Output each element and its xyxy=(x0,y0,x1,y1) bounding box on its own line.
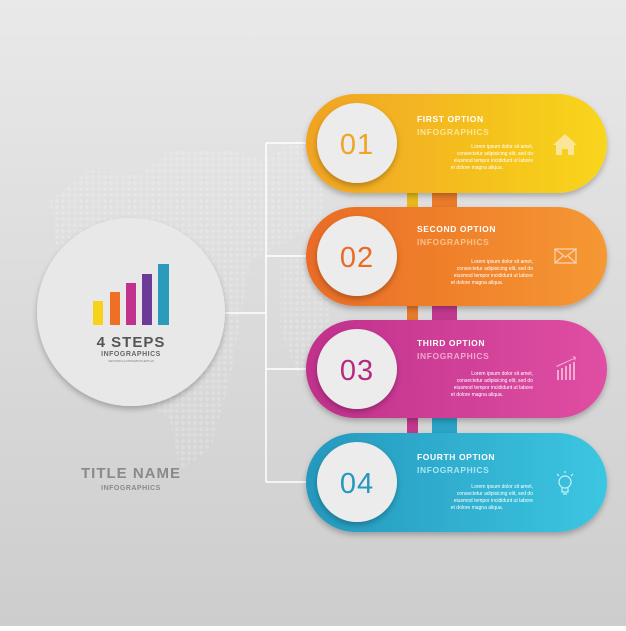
option 4: eiusmod tempor incididunt ut labore xyxy=(454,498,533,504)
option 1: 01 xyxy=(340,129,374,161)
option 2: SECOND OPTION xyxy=(417,224,496,234)
option 1 xyxy=(306,94,607,193)
option 3: consectetur adipisicing elit, sed do xyxy=(457,378,533,384)
option 3: 03 xyxy=(340,355,374,387)
option 1: Lorem ipsum dolor sit amet, xyxy=(471,144,533,150)
option 1: INFOGRAPHICS xyxy=(417,127,489,137)
option 3 xyxy=(306,320,607,418)
option 4: consectetur adipisicing elit, sed do xyxy=(457,491,533,497)
option 4 xyxy=(306,433,607,532)
option 2: 02 xyxy=(340,242,374,274)
option 3: et dolore magna aliqua. xyxy=(451,392,503,398)
icon: envelope xyxy=(555,249,576,263)
connector strips xyxy=(407,190,457,436)
option 2: et dolore magna aliqua. xyxy=(451,280,503,286)
option 1: FIRST OPTION xyxy=(417,114,484,124)
main circle: INFOGRAPHICS xyxy=(101,351,161,358)
option 2: INFOGRAPHICS xyxy=(417,237,489,247)
main circle xyxy=(37,218,225,406)
icon: bulb xyxy=(557,471,573,494)
option 4: 04 xyxy=(340,468,374,500)
title name xyxy=(81,465,181,492)
option 3: THIRD OPTION xyxy=(417,338,485,348)
option 3: Lorem ipsum dolor sit amet, xyxy=(471,371,533,377)
option 2: eiusmod tempor incididunt ut labore xyxy=(454,273,533,279)
option 1: consectetur adipisicing elit, sed do xyxy=(457,151,533,157)
option 4: et dolore magna aliqua. xyxy=(451,505,503,511)
title name: INFOGRAPHICS xyxy=(101,485,161,492)
option 3: INFOGRAPHICS xyxy=(417,351,489,361)
icon: growth chart xyxy=(556,356,576,380)
option 1: eiusmod tempor incididunt ut labore xyxy=(454,158,533,164)
option 4: Lorem ipsum dolor sit amet, xyxy=(471,484,533,490)
option 1: et dolore magna aliqua. xyxy=(451,165,503,171)
option 4: FOURTH OPTION xyxy=(417,452,495,462)
option 3: eiusmod tempor incididunt ut labore xyxy=(454,385,533,391)
bar chart icon xyxy=(93,264,169,325)
connector lines xyxy=(225,143,310,482)
main circle title: 4 STEPS xyxy=(97,334,165,351)
option 2: Lorem ipsum dolor sit amet, xyxy=(471,259,533,265)
icon: house xyxy=(553,134,577,155)
option 2: consectetur adipisicing elit, sed do xyxy=(457,266,533,272)
title name: TITLE NAME xyxy=(81,465,181,482)
option 2 xyxy=(306,207,607,306)
option 4: INFOGRAPHICS xyxy=(417,465,489,475)
main circle: VECTOR ILLUSTRATION EPS 10 xyxy=(108,359,154,363)
